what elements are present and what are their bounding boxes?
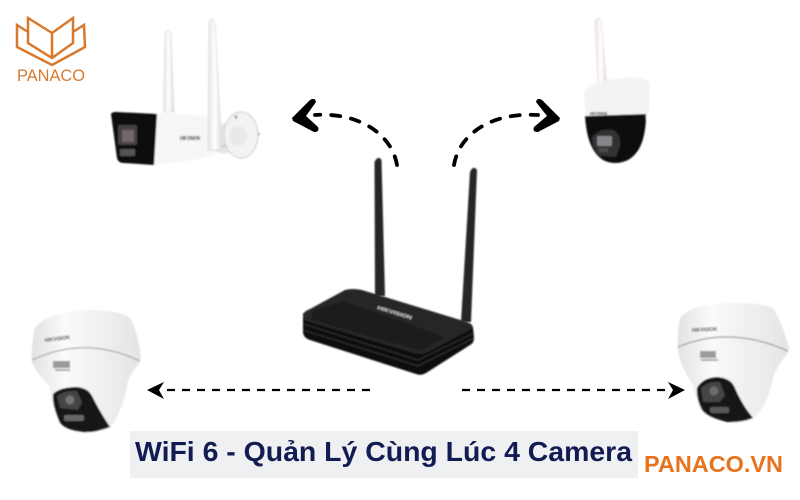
router body <box>303 289 474 375</box>
title text: WiFi 6 - Quản Lý Cùng Lúc 4 Camera <box>135 436 633 467</box>
camera: dome, bottom left <box>32 310 141 432</box>
website label: PANACO.VN <box>644 451 783 477</box>
arrow: router to bottom left camera <box>147 382 370 399</box>
router antennas <box>374 158 477 322</box>
arrow: router to top right camera <box>454 99 560 165</box>
camera: dome, bottom left: HIKVISION <box>45 335 70 344</box>
camera: bullet with two antennas, top left: HIKVISION <box>180 136 200 142</box>
camera: dome, bottom right: HIKVISION <box>692 327 717 334</box>
logo wordmark: PANACO <box>17 67 85 85</box>
camera: bullet with two antennas, top left <box>111 19 260 165</box>
camera: PTZ with one antenna, top right: HIKVISION <box>590 111 607 116</box>
arrow: router to bottom right camera <box>462 382 685 399</box>
logo: PANACO book <box>17 18 85 85</box>
router body: HIKVISION <box>376 305 413 322</box>
arrow: router to top left camera <box>292 99 397 165</box>
title banner <box>130 431 638 478</box>
camera: PTZ with one antenna, top right <box>584 18 650 163</box>
router: black with two antennas <box>303 158 477 375</box>
camera: dome, bottom right <box>678 303 789 423</box>
